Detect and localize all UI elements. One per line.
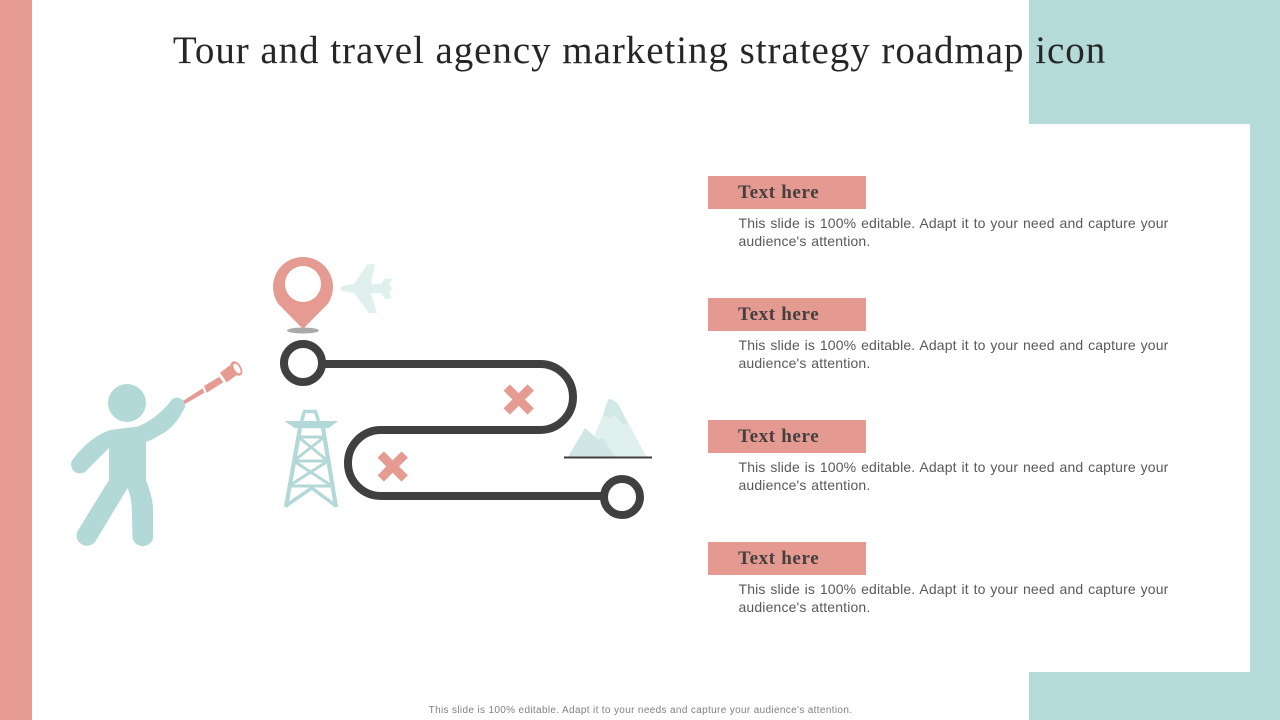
teal corner frame (1029, 0, 1280, 720)
item 2 text: This slide is 100% editable. Adapt it to your need and capture your (738, 337, 1168, 353)
roadmap path (284, 344, 640, 515)
item 4 text (738, 581, 1168, 615)
item 3 text: This slide is 100% editable. Adapt it to your need and capture your (738, 459, 1168, 475)
telescope (183, 359, 245, 404)
footer note: This slide is 100% editable. Adapt it to your needs and capture your audience's attention. (429, 705, 852, 716)
icon: x marker lower (381, 454, 405, 478)
item 1 text: This slide is 100% editable. Adapt it to your need and capture your (738, 215, 1168, 231)
white content panel (1029, 124, 1250, 672)
title: Tour and travel agency marketing strategy roadmap icon (173, 29, 1106, 72)
icon: location pin (273, 257, 333, 334)
item 4 heading: Text here (738, 548, 819, 569)
item 4 heading (708, 542, 866, 575)
item 1 heading (708, 176, 866, 209)
item 3 text (738, 459, 1168, 493)
icon: x marker upper (507, 388, 531, 412)
item 1 text: audience's attention. (738, 233, 870, 249)
item 3 heading: Text here (738, 426, 819, 447)
item 2 text: audience's attention. (738, 355, 870, 371)
item 2 heading: Text here (738, 304, 819, 325)
item 3 heading (708, 420, 866, 453)
item 2 text (738, 337, 1168, 371)
item 1 heading: Text here (738, 182, 819, 203)
item 2 heading (708, 298, 866, 331)
icon: mountains (564, 399, 652, 458)
icon: radio tower (284, 412, 338, 507)
icon: airplane (340, 264, 393, 313)
item 3 text: audience's attention. (738, 477, 870, 493)
icon: person with telescope (71, 359, 245, 546)
item 4 text: audience's attention. (738, 599, 870, 615)
left accent bar (0, 0, 32, 720)
item 4 text: This slide is 100% editable. Adapt it to your need and capture your (738, 581, 1168, 597)
item 1 text (738, 215, 1168, 249)
